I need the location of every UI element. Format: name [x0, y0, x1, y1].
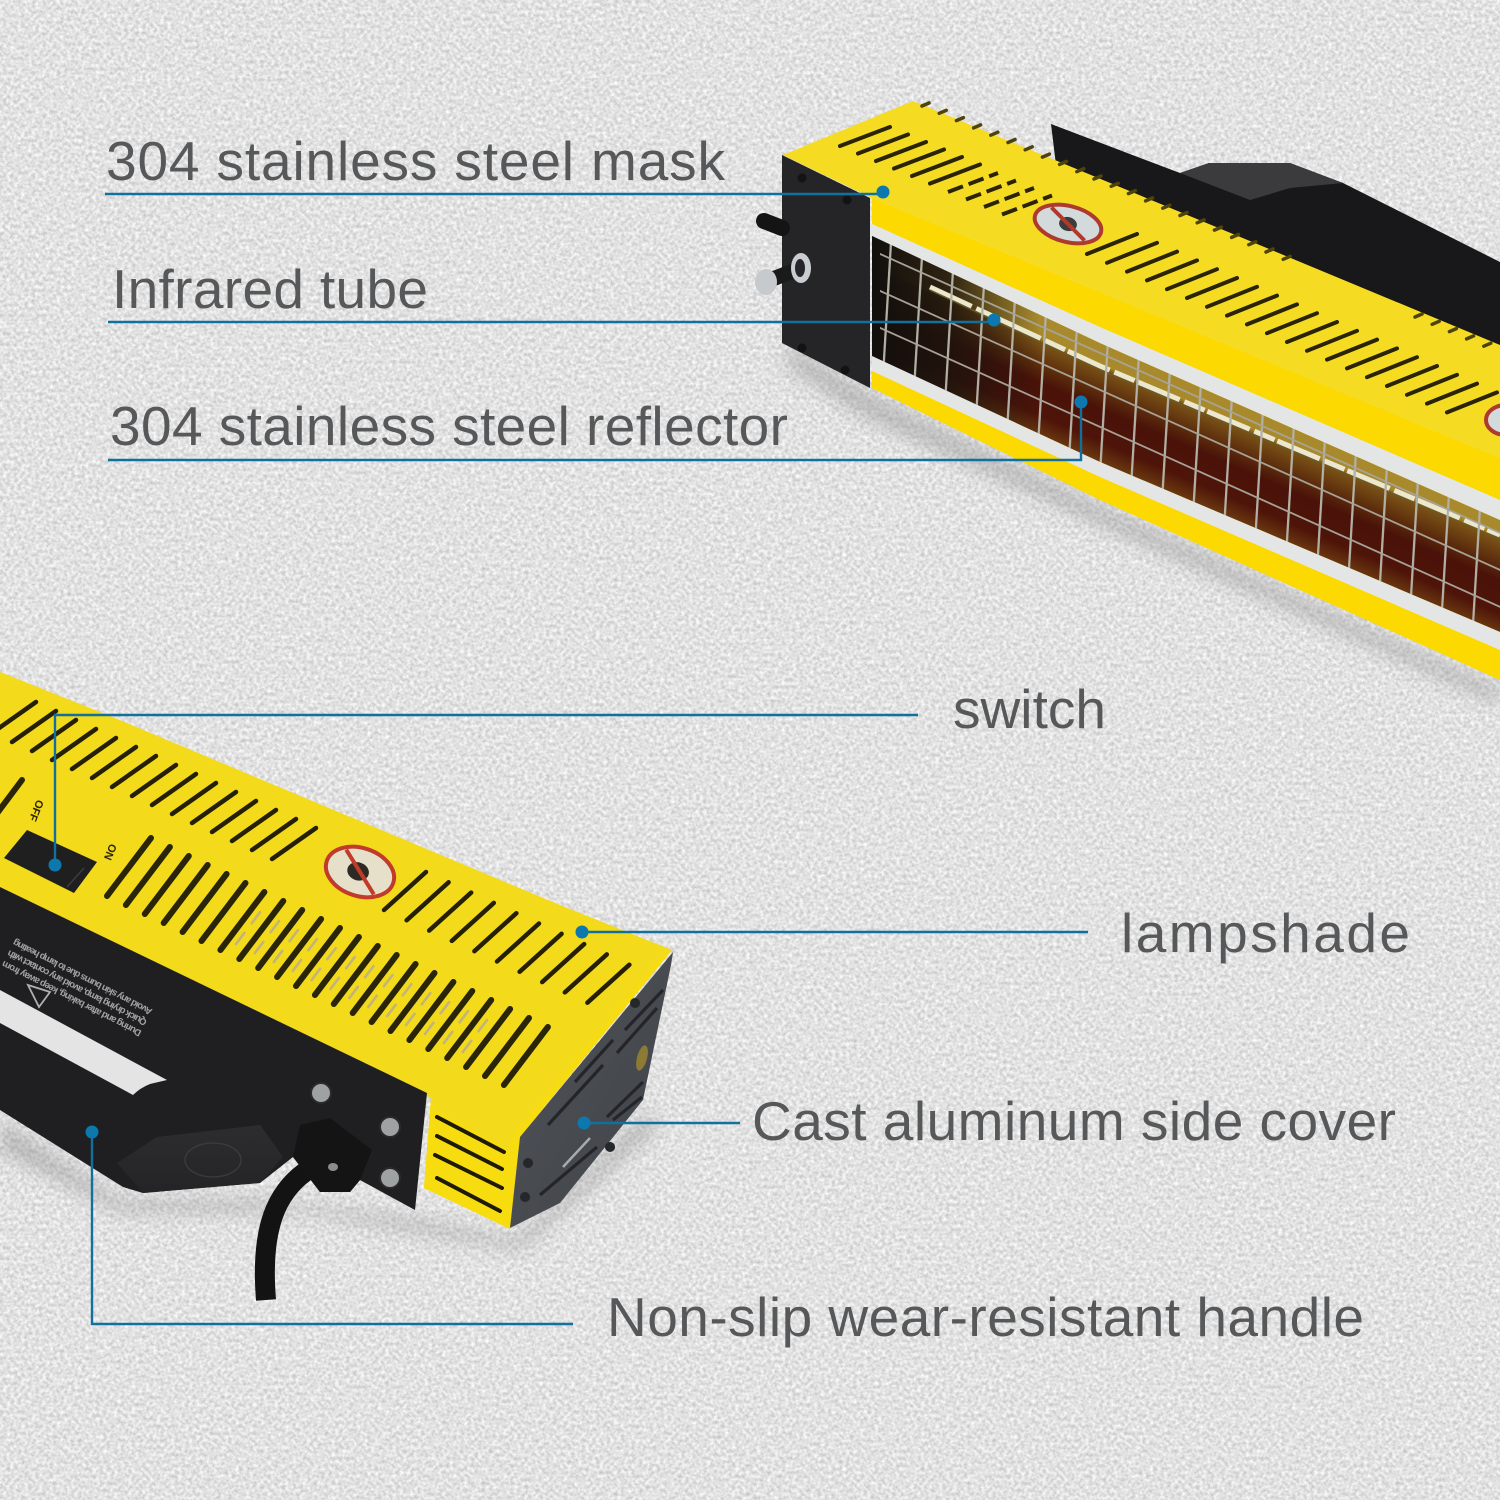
side cover silver slot: [563, 1138, 590, 1167]
soft shadow under top heater: [785, 345, 1500, 705]
callout: cast aluminum side cover: [578, 1090, 1396, 1152]
bracket bolts: [311, 1083, 400, 1188]
callout: 304 stainless steel reflector: [108, 395, 1088, 460]
leader line: [105, 193, 883, 195]
warning line 1: During and after baking, keep away from: [0, 958, 143, 1038]
marker dot: [48, 858, 62, 872]
marker dot: [576, 926, 588, 938]
leader line: [108, 402, 1081, 460]
callout: switch: [48, 678, 1106, 872]
end cap plate: [782, 155, 870, 388]
vent slots, left of sign: [840, 127, 980, 184]
marker dot: [876, 186, 890, 198]
bolt washer: [791, 253, 811, 283]
label: lampshade: [1121, 902, 1410, 964]
switch body: [4, 830, 97, 893]
label: Cast aluminum side cover: [752, 1090, 1396, 1152]
end cap screws: [802, 178, 847, 370]
marker dot: [1074, 396, 1088, 408]
power cable: [265, 1172, 305, 1300]
icon: no insects sign: [319, 838, 401, 906]
black handle and bracket plate: [0, 887, 427, 1210]
upper white strip: [870, 223, 1500, 520]
handle end cap circle: [185, 1143, 241, 1177]
vent slots, lower row: [0, 780, 548, 1085]
callout: 304 stainless steel mask: [105, 130, 890, 198]
gland silver dot: [328, 1163, 338, 1171]
handle upper highlight: [1180, 163, 1343, 200]
marker dot: [578, 1116, 590, 1130]
rocker divide: [67, 868, 84, 887]
heater: rear view, top right: [755, 101, 1500, 705]
sign ring: [319, 838, 401, 906]
sign ring: [1031, 198, 1105, 250]
vent slots, upper row left: [0, 702, 316, 859]
casing end vents: [435, 1117, 504, 1211]
folded front band: [0, 885, 672, 1229]
callout: infrared tube: [108, 258, 1000, 326]
dark left end of window: [872, 235, 1040, 435]
soft shadow under bottom heater: [0, 1115, 660, 1250]
switch OFF label: OFF: [26, 798, 45, 823]
lampshade top face: [783, 101, 1500, 458]
label: Non-slip wear-resistant handle: [607, 1286, 1364, 1348]
heater: front view, bottom left: [0, 672, 673, 1300]
tube line: [930, 287, 1500, 535]
leader line: [92, 1132, 573, 1324]
vent slots, right of sign: [1087, 234, 1497, 412]
icon: partial no insects sign: [1486, 405, 1500, 435]
label: 304 stainless steel reflector: [110, 395, 788, 457]
bolt shaft: [770, 266, 806, 280]
handle end cap: [117, 1125, 283, 1193]
tube shade: [930, 290, 1500, 539]
lower white strip: [872, 356, 1500, 650]
lampshade front face: [872, 198, 1500, 680]
side cover slots: [540, 990, 663, 1195]
warning text on bracket: [0, 936, 154, 1038]
cable gland: [293, 1118, 372, 1192]
washer centre: [795, 259, 805, 277]
bolt 3: [380, 1168, 400, 1188]
prohibition slash: [1046, 208, 1090, 240]
leader line: [55, 715, 918, 864]
bolt 2: [380, 1117, 400, 1137]
marker dot: [86, 1126, 98, 1138]
rocker switch: [4, 830, 97, 893]
mounting pin: [764, 221, 782, 228]
label: Infrared tube: [112, 258, 428, 320]
protective wire mesh: [880, 244, 1500, 621]
label: 304 stainless steel mask: [106, 130, 726, 192]
silver bolt: [755, 253, 811, 295]
leader line: [108, 321, 994, 323]
side cover screws: [525, 1003, 635, 1197]
handle slot opening: [0, 990, 167, 1095]
callout: non-slip wear-resistant handle: [86, 1126, 1364, 1348]
callout: lampshade: [576, 902, 1410, 964]
infrared tube: [930, 287, 1500, 539]
top row of small holes: [922, 103, 1491, 346]
vent slots, upper row right: [384, 872, 629, 1003]
leader line: [584, 1122, 740, 1124]
bolt 1: [311, 1083, 331, 1103]
warning triangle: [28, 985, 50, 1007]
lampshade body: [0, 672, 672, 1229]
broken vent slots near sign: [948, 173, 1052, 214]
switch ON label: ON: [101, 842, 118, 862]
warning line 2: Quick drying lamp, avoid any contact with: [6, 947, 149, 1027]
bolt head: [755, 269, 777, 295]
marker dot: [988, 314, 1000, 326]
cast aluminum side cover: [510, 952, 673, 1228]
light showing through lower vents: [236, 907, 491, 1052]
icon: no insects sign: [1031, 198, 1105, 250]
insect mark: [345, 859, 371, 883]
infrared window: [872, 235, 1500, 632]
insect mark: [1058, 215, 1078, 233]
label: switch: [953, 678, 1106, 740]
leader line: [582, 931, 1088, 933]
warning line 3: Avoid any skin burns due to lamp heating: [11, 936, 154, 1017]
prohibition slash: [336, 850, 384, 894]
side cover hole: [634, 1044, 650, 1072]
rear mounting plate and handle: [1051, 124, 1500, 350]
